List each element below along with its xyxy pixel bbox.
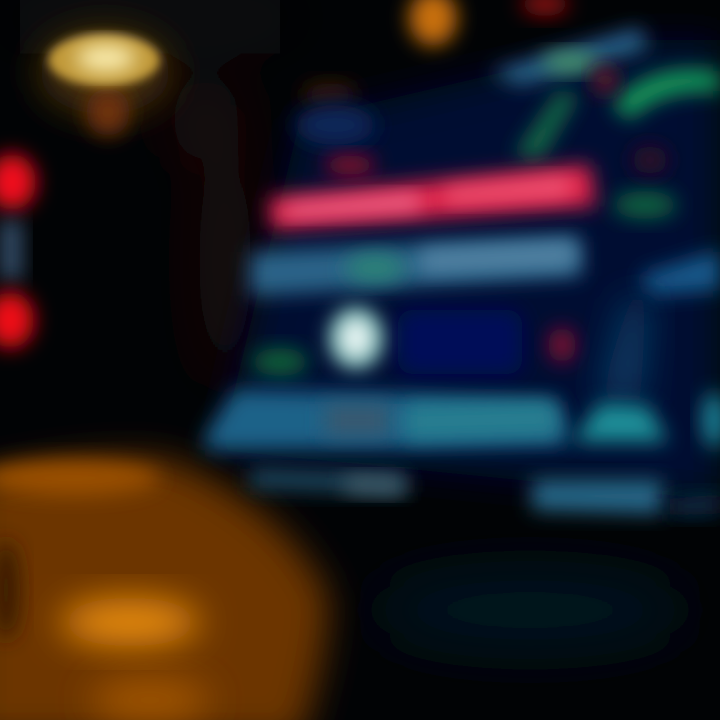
- screen base glow: [220, 40, 720, 500]
- ceiling lamp: [39, 30, 171, 136]
- navy centre block: [398, 310, 522, 374]
- orange lights at top: [302, 0, 569, 107]
- blue text band: [250, 236, 582, 296]
- small coloured marks: [252, 348, 308, 376]
- upper blue band: [490, 28, 648, 85]
- bottom labels: [250, 468, 405, 494]
- keyboard reflections lower right: [370, 570, 690, 650]
- dark wall at upper left: [0, 0, 300, 390]
- lower blue band: [205, 390, 568, 450]
- green chart lines: [612, 69, 720, 120]
- white glowing dot: [328, 306, 384, 370]
- monitor screen: [205, 28, 720, 516]
- orange glowing table: [0, 458, 330, 720]
- red lights at left edge: [0, 154, 36, 348]
- red headline band: [324, 155, 376, 175]
